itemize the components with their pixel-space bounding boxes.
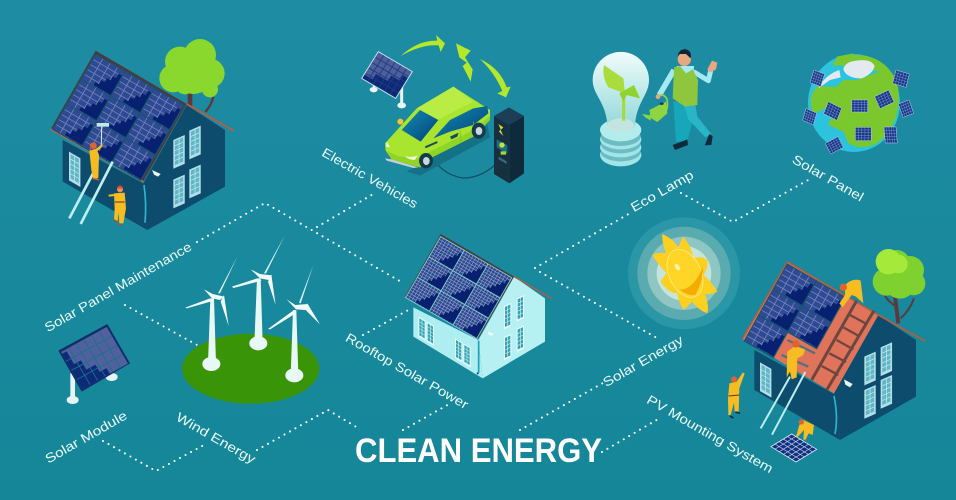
icon: small solar panel on stand xyxy=(362,52,412,108)
icon: worker with roller xyxy=(89,123,109,180)
icon: sun with halo xyxy=(628,217,740,329)
label: Eco Lamp: Eco Lamp xyxy=(628,167,696,215)
title: CLEAN ENERGY xyxy=(355,432,602,470)
icon: lightning bolt xyxy=(456,43,473,82)
icon: ladder xyxy=(761,372,805,435)
label: Solar Panel: Solar Panel xyxy=(790,152,867,204)
house walls xyxy=(63,104,234,230)
icon: tree xyxy=(159,39,225,112)
icon: worker on ladder xyxy=(782,340,815,379)
tiled roof with panels xyxy=(742,262,878,393)
icon: standing worker xyxy=(109,186,126,225)
label: Electric Vehicles: Electric Vehicles xyxy=(319,145,421,212)
icon: worker on roof xyxy=(839,280,863,307)
icon: arrow to bolt xyxy=(401,35,445,56)
icon: solar module xyxy=(58,324,130,404)
label: Solar Module: Solar Module xyxy=(42,408,130,466)
dotted connector lines xyxy=(103,179,810,471)
icon: gardener with watering can xyxy=(642,49,717,150)
label: Wind Energy: Wind Energy xyxy=(174,409,259,467)
illustration: electric vehicle charging xyxy=(362,35,524,183)
icon: charging cable xyxy=(427,149,502,178)
icon: globe with solar panels xyxy=(803,53,914,154)
solar roof xyxy=(51,51,187,182)
house walls xyxy=(754,315,925,440)
illustration: wind farm and solar module xyxy=(58,235,320,404)
label: Rooftop Solar Power: Rooftop Solar Power xyxy=(343,330,472,412)
icon: ladder xyxy=(69,162,113,224)
icon: arrow to charger xyxy=(480,59,511,97)
icon: waving worker xyxy=(728,373,745,418)
icon: tree xyxy=(873,249,925,323)
icon: charging station xyxy=(494,107,524,183)
illustration: PV mounting house xyxy=(728,249,925,462)
label: PV Mounting System: PV Mounting System xyxy=(644,392,776,476)
icon: car xyxy=(385,87,490,176)
solar roof xyxy=(405,234,514,339)
icon: panel on ground xyxy=(771,419,817,462)
icon: eco lamp xyxy=(593,52,649,166)
label: Solar Energy: Solar Energy xyxy=(600,332,686,390)
illustration: house with solar panel maintenance xyxy=(51,39,234,230)
house walls xyxy=(413,277,552,378)
illustration: rooftop solar house xyxy=(405,234,552,378)
illustration: eco lamp, gardener and globe xyxy=(593,49,914,166)
label: Solar Panel Maintenance: Solar Panel Maintenance xyxy=(42,239,194,335)
icon: wind turbines on green hill xyxy=(182,235,320,404)
